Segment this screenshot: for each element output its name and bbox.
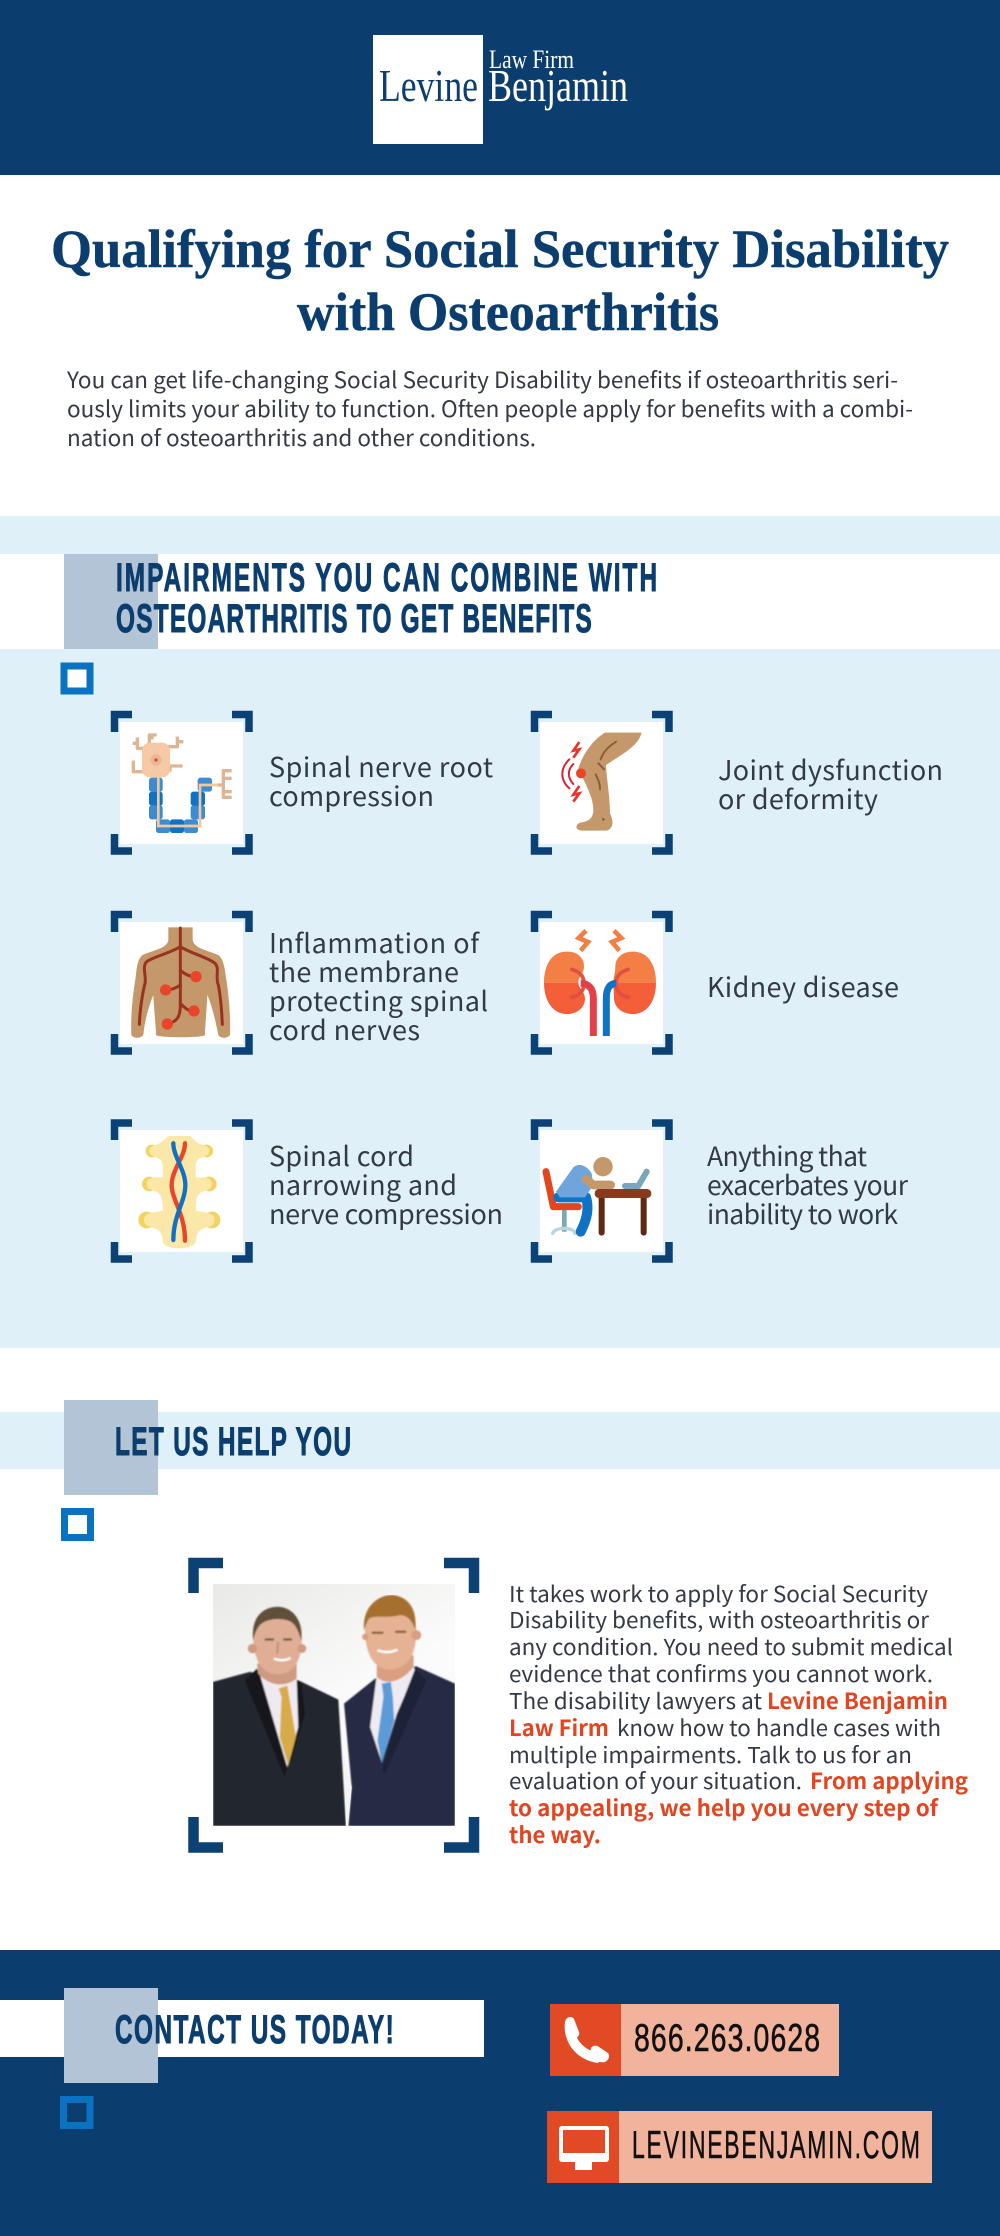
phone button bbox=[550, 2004, 839, 2076]
label bbox=[718, 749, 943, 817]
icon: spine bbox=[138, 1136, 220, 1248]
label: narrowing and bbox=[269, 1164, 457, 1203]
label: Spinal nerve root bbox=[269, 746, 493, 785]
header banner with logo: Levine bbox=[379, 61, 478, 111]
text block: help paragraph: It takes work to apply for Social Security bbox=[509, 1577, 929, 1609]
small blue square bbox=[64, 2100, 90, 2126]
label bbox=[269, 922, 488, 1048]
text block: help paragraph: to appealing, we help you every step of bbox=[509, 1791, 939, 1823]
label bbox=[269, 746, 493, 814]
text block: help paragraph: evidence that confirms you cannot work. bbox=[509, 1657, 933, 1689]
heading: contact us today bbox=[0, 1988, 484, 2083]
phone button: 866.263.0628 bbox=[634, 2017, 820, 2060]
heading: impairments bbox=[64, 554, 657, 649]
text block: help paragraph: know how to handle cases with bbox=[617, 1711, 941, 1743]
text block: help paragraph: The disability lawyers at bbox=[509, 1684, 762, 1716]
title bbox=[51, 219, 949, 342]
right man bbox=[344, 1595, 455, 1826]
header banner with logo bbox=[0, 0, 1000, 175]
card: inflammation of the membrane bbox=[114, 914, 488, 1051]
label: Anything that bbox=[707, 1135, 867, 1174]
text block: help paragraph: Disability benefits, with osteoarthritis or bbox=[509, 1603, 929, 1635]
heading: let us help you bbox=[0, 1400, 1000, 1495]
website button: LEVINEBENJAMIN.COM bbox=[632, 2123, 920, 2167]
text block: help paragraph: Law Firm bbox=[509, 1711, 609, 1743]
text block: help paragraph: evaluation of your situation. bbox=[509, 1764, 802, 1796]
card: spinal nerve root compression bbox=[114, 714, 493, 851]
label: compression bbox=[269, 775, 434, 814]
label: Joint dysfunction bbox=[718, 749, 943, 788]
left man bbox=[213, 1607, 346, 1826]
title: with Osteoarthritis bbox=[297, 282, 719, 342]
heading: let us help you: LET US HELP YOU bbox=[115, 1420, 351, 1465]
website button bbox=[547, 2111, 932, 2183]
card: joint dysfunction bbox=[534, 714, 943, 851]
label: nerve compression bbox=[269, 1193, 503, 1232]
title: Qualifying for Social Security Disability bbox=[51, 219, 949, 279]
label bbox=[269, 1135, 503, 1232]
text block: help paragraph: any condition. You need to submit medical bbox=[509, 1630, 953, 1662]
text block: help paragraph bbox=[509, 1577, 968, 1850]
label: or deformity bbox=[718, 778, 878, 817]
icon: kidneys bbox=[544, 931, 656, 1036]
label: Spinal cord bbox=[269, 1135, 414, 1174]
panel: let us help you bbox=[0, 1400, 1000, 1850]
panel: contact footer bbox=[0, 1950, 1000, 2236]
card: spinal cord narrowing bbox=[114, 1123, 503, 1259]
intro paragraph: You can get life-changing Social Security Disability benefits if osteoarthritis seri- bbox=[66, 363, 898, 395]
intro paragraph: nation of osteoarthritis and other conditions. bbox=[67, 421, 536, 453]
text block: help paragraph: the way. bbox=[509, 1818, 601, 1850]
heading: impairments: OSTEOARTHRITIS TO GET BENEFITS bbox=[116, 597, 592, 642]
photo: two lawyers in brackets bbox=[194, 1563, 474, 1848]
intro paragraph bbox=[66, 363, 913, 453]
text block: help paragraph: multiple impairments. Talk to us for an bbox=[509, 1738, 912, 1770]
header banner with logo: Benjamin bbox=[488, 61, 628, 111]
label bbox=[707, 1135, 909, 1232]
panel: impairments bbox=[0, 516, 1000, 1348]
heading: contact us today: CONTACT US TODAY! bbox=[115, 2008, 394, 2053]
text block: help paragraph: Levine Benjamin bbox=[767, 1684, 948, 1716]
card: kidney disease bbox=[534, 914, 899, 1051]
label: inability to work bbox=[707, 1193, 898, 1232]
icon: person slumped at desk bbox=[546, 1157, 651, 1233]
card: inability to work bbox=[534, 1123, 909, 1259]
header banner with logo: Law Firm bbox=[489, 45, 574, 74]
gap between the two men bbox=[343, 1754, 352, 1826]
label: the membrane bbox=[269, 951, 459, 990]
heading: impairments: IMPAIRMENTS YOU CAN COMBINE WITH bbox=[116, 556, 657, 601]
icon: nerve cell bbox=[133, 733, 232, 833]
small blue square bbox=[64, 1512, 90, 1538]
label: cord nerves bbox=[269, 1009, 420, 1048]
icon: phone handset bbox=[565, 2017, 609, 2062]
label: Inflammation of bbox=[269, 922, 480, 961]
text block: help paragraph: From applying bbox=[810, 1764, 968, 1796]
icon: leg with knee pain bbox=[562, 733, 642, 831]
icon: monitor bbox=[559, 2126, 609, 2170]
intro paragraph: ously limits your ability to function. Often people apply for benefits with a combi- bbox=[67, 392, 913, 424]
label: Kidney disease bbox=[707, 966, 899, 1005]
label: exacerbates your bbox=[707, 1164, 909, 1203]
icon: torso nerves bbox=[131, 927, 230, 1038]
small blue square bbox=[64, 666, 90, 691]
label: protecting spinal bbox=[269, 980, 488, 1019]
